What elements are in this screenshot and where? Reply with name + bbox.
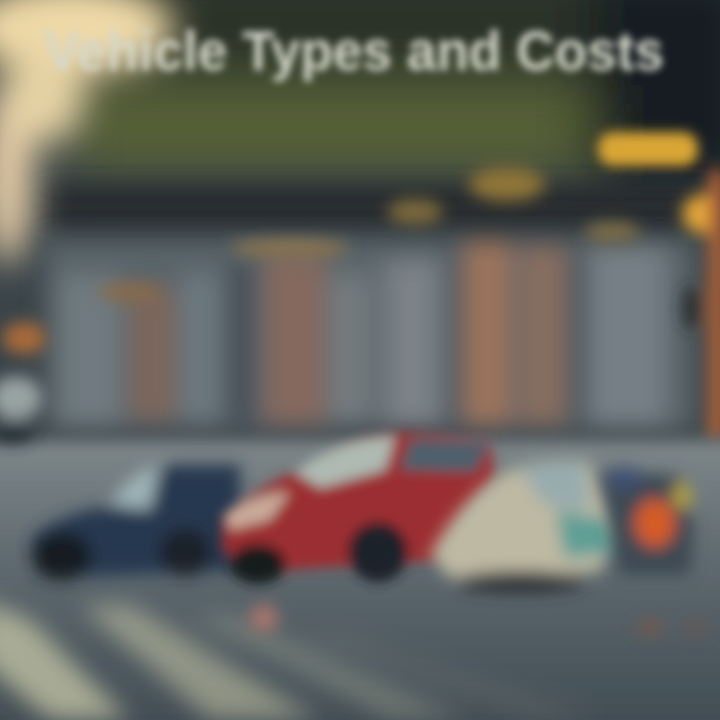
chart: blurred cost columns	[45, 240, 695, 430]
left side orange tag	[2, 322, 46, 354]
highlighted label: yellow tag	[598, 132, 698, 166]
road reflection marks	[250, 604, 708, 636]
road	[0, 440, 720, 720]
car: dark blue	[30, 465, 240, 580]
right edge orange accent	[682, 170, 720, 440]
car: orange and dark	[600, 467, 694, 575]
left small car	[0, 376, 42, 443]
car: red	[222, 432, 495, 584]
title: Vehicle Types and Costs	[44, 19, 664, 82]
car: white and teal	[430, 460, 620, 593]
column value labels	[98, 167, 640, 301]
sun flare	[0, 0, 175, 265]
road stripes	[0, 600, 600, 720]
